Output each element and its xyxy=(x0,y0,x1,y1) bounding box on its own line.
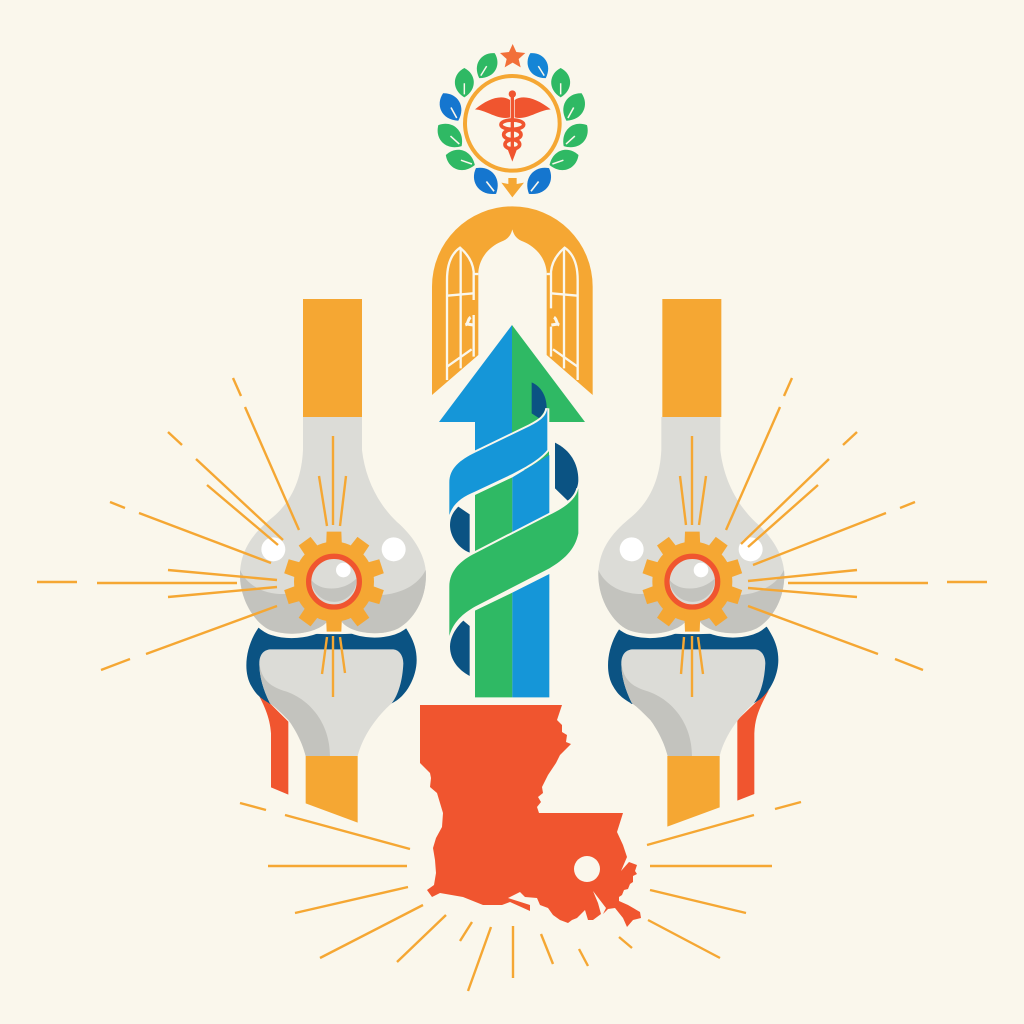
leaf wreath xyxy=(432,48,594,200)
right knee joint xyxy=(598,299,784,827)
bottom rays xyxy=(240,802,801,991)
red tendon xyxy=(737,690,769,801)
left gear xyxy=(284,532,384,632)
meniscus xyxy=(246,627,417,704)
highlights xyxy=(261,537,285,561)
icon: down arrow xyxy=(501,178,524,197)
red tendon xyxy=(255,688,288,795)
lower orange block xyxy=(306,756,358,823)
bone shade xyxy=(598,570,692,634)
right door xyxy=(547,248,578,380)
shaft mid section xyxy=(475,477,512,553)
Louisiana map xyxy=(420,705,641,927)
left door xyxy=(447,248,478,380)
icon: caduceus xyxy=(475,90,551,162)
gear teeth and body xyxy=(284,532,384,632)
left knee joint xyxy=(240,299,426,823)
left joint rays xyxy=(37,378,346,697)
upper bone xyxy=(598,417,784,634)
gear ball xyxy=(309,556,359,607)
gear teeth and body xyxy=(642,532,743,632)
shaft lower section xyxy=(475,593,512,697)
bone shade xyxy=(240,570,333,634)
upper bone xyxy=(240,417,426,634)
upper orange block xyxy=(303,299,362,417)
blue ribbon xyxy=(449,408,547,515)
icon: star xyxy=(500,44,525,67)
meniscus xyxy=(608,627,778,704)
lower bone xyxy=(259,649,403,756)
lower bone shade xyxy=(259,663,330,756)
arch frame xyxy=(432,206,593,395)
lower bone shade xyxy=(621,663,692,756)
lower orange block xyxy=(667,756,720,827)
arrow head and upper shaft xyxy=(439,325,585,470)
state shape xyxy=(420,705,641,927)
right gear xyxy=(642,532,743,632)
ring xyxy=(465,76,560,171)
green ribbon xyxy=(449,488,578,636)
gear ball xyxy=(667,556,718,607)
dark ribbon back sections xyxy=(450,382,578,676)
right joint rays xyxy=(680,378,987,697)
central arrow with ribbons xyxy=(439,325,585,697)
emblem: caduceus wreath xyxy=(432,44,594,200)
upper orange block xyxy=(662,299,721,417)
city marker xyxy=(574,856,600,882)
highlights xyxy=(620,537,644,561)
doorway arch xyxy=(432,206,593,395)
lower bone xyxy=(621,649,765,756)
